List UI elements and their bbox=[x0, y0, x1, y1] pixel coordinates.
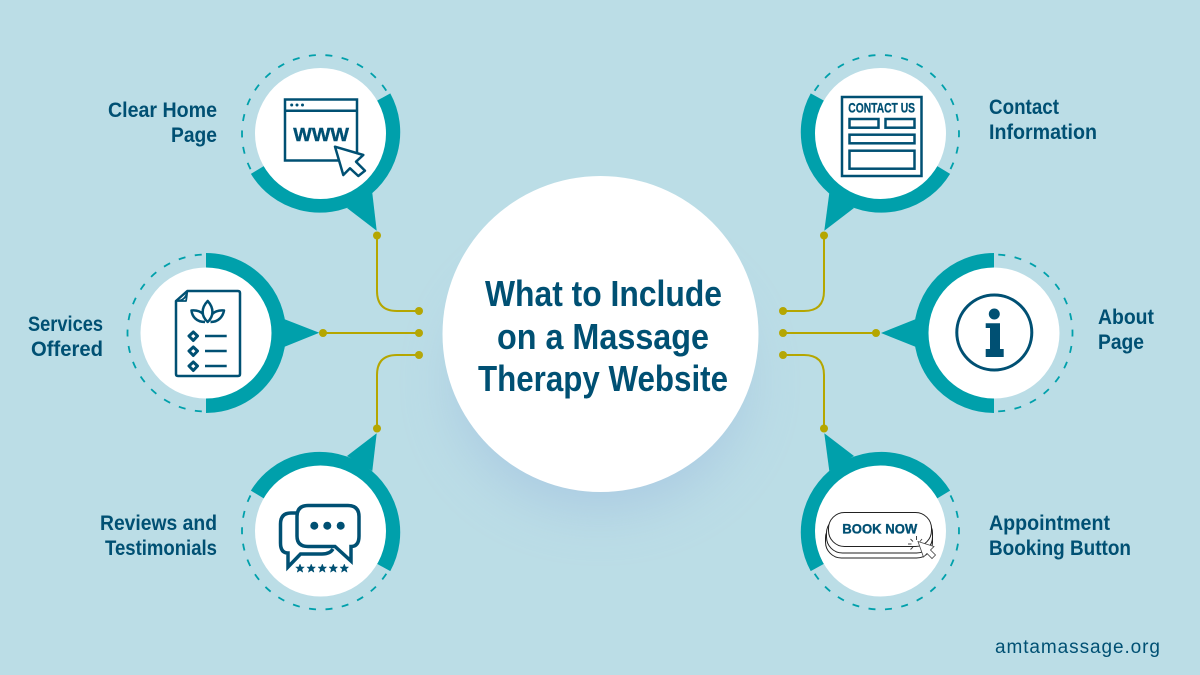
panel: appointment booking button bbox=[808, 433, 959, 609]
icon: service document bbox=[176, 291, 240, 376]
label: clear home page: Clear Home bbox=[108, 99, 217, 122]
label: contact information bbox=[989, 96, 1097, 144]
label: contact information: Information bbox=[989, 121, 1097, 144]
title: What to Include bbox=[485, 273, 722, 314]
panel: services offered bbox=[128, 254, 319, 412]
icon: book now button: BOOK NOW bbox=[842, 521, 918, 537]
label: reviews and testimonials: Reviews and bbox=[100, 512, 217, 535]
title bbox=[478, 273, 728, 399]
website url: amtamassage.org bbox=[995, 637, 1160, 658]
icon: contact form: CONTACT US bbox=[848, 100, 915, 115]
panel: about page bbox=[881, 254, 1072, 412]
label: appointment booking button bbox=[989, 512, 1131, 560]
label: clear home page bbox=[108, 99, 217, 147]
label: clear home page: Page bbox=[171, 124, 217, 147]
icon: contact form bbox=[842, 97, 922, 176]
label: appointment booking button: Booking Button bbox=[989, 537, 1131, 560]
label: about page: Page bbox=[1098, 331, 1144, 354]
title: Therapy Website bbox=[478, 358, 728, 399]
label: services offered: Offered bbox=[31, 338, 103, 361]
label: contact information: Contact bbox=[989, 96, 1059, 119]
label: about page bbox=[1098, 306, 1154, 354]
panel: reviews and testimonials bbox=[242, 433, 393, 609]
label: reviews and testimonials bbox=[100, 512, 217, 560]
panel: clear home page bbox=[242, 55, 393, 231]
label: reviews and testimonials: Testimonials bbox=[105, 537, 217, 560]
icon: speech bubbles with stars bbox=[280, 506, 359, 572]
panel: contact information bbox=[808, 55, 959, 231]
label: services offered: Services bbox=[28, 313, 103, 336]
connector lines bbox=[319, 232, 880, 432]
central circle with title bbox=[442, 176, 758, 510]
icon: browser www: WWW bbox=[293, 125, 349, 145]
title: on a Massage bbox=[497, 316, 709, 357]
icon: info bbox=[957, 295, 1032, 370]
icon: book now button bbox=[826, 512, 936, 558]
label: services offered bbox=[28, 313, 103, 361]
icon: browser www bbox=[285, 100, 365, 176]
label: appointment booking button: Appointment bbox=[989, 512, 1110, 535]
label: about page: About bbox=[1098, 306, 1154, 329]
